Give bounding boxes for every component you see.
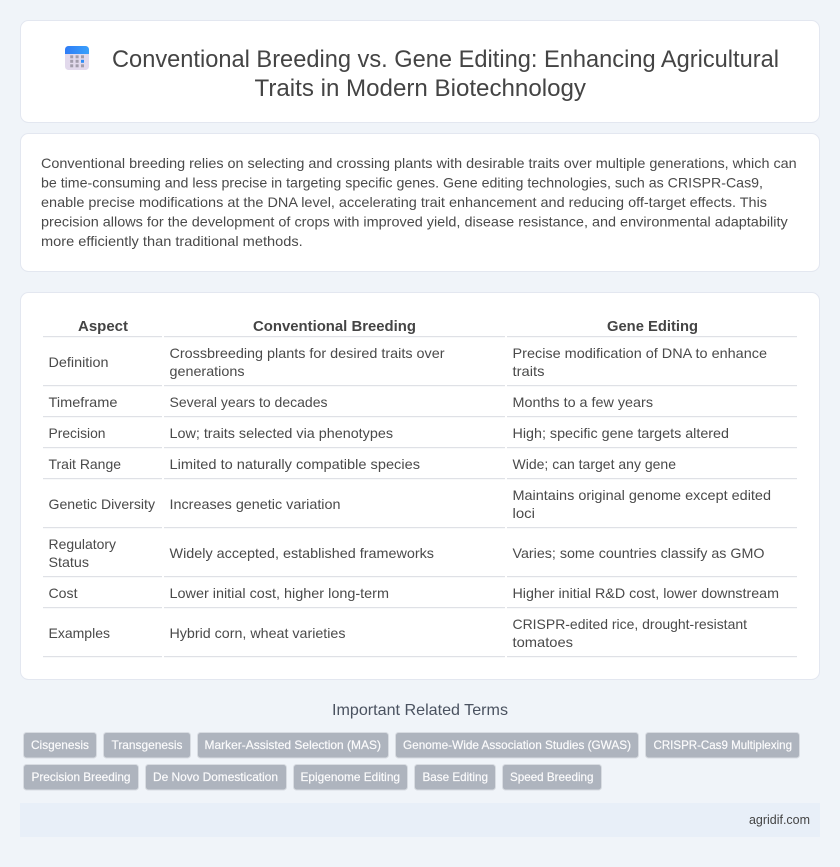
intro text block: enable precise modifications at the DNA level, accelerating trait enhancement and reducing off-target effects. This [41, 194, 767, 210]
title [112, 46, 779, 102]
row: regulatory status: Varies; some countries classify as GMO [512, 545, 765, 561]
row: precision: Low; traits selected via phenotypes [170, 425, 393, 441]
row: genetic diversity [48, 487, 771, 521]
row: precision: Precision [48, 425, 106, 441]
footer [20, 803, 820, 837]
row: regulatory status: Status [48, 554, 89, 570]
row: definition: generations [170, 363, 244, 379]
row: definition [48, 345, 767, 379]
table header: Aspect [78, 319, 128, 335]
row: timeframe [48, 394, 653, 410]
row: timeframe: Months to a few years [512, 394, 653, 410]
row: definition: traits [512, 363, 544, 379]
row: examples [48, 616, 747, 650]
footer: agridif.com [749, 813, 810, 827]
row: trait range: Wide; can target any gene [512, 456, 676, 472]
related term chips: Cisgenesis [31, 738, 89, 752]
related term chips: Marker-Assisted Selection (MAS) [204, 738, 381, 752]
title: Conventional Breeding vs. Gene Editing: Enhancing Agricultural [112, 46, 779, 73]
table header [78, 319, 698, 335]
row: genetic diversity: Maintains original genome except edited [512, 487, 771, 503]
row: precision [48, 425, 729, 441]
intro text block: be time-consuming and less precise in targeting specific genes. Gene editing technologies, such as CRISPR-Cas9, [41, 174, 763, 190]
related term chips: CRISPR-Cas9 Multiplexing [654, 738, 792, 752]
heading: important related terms: Important Related Terms [332, 702, 508, 719]
intro text block: precision allows for the development of crops with improved yield, disease resistance, and environmental adaptability [41, 214, 788, 230]
related term chips: De Novo Domestication [153, 770, 278, 784]
related term chips: Transgenesis [112, 738, 182, 752]
row: definition: Crossbreeding plants for desired traits over [170, 345, 445, 361]
row: cost: Higher initial R&D cost, lower downstream [512, 585, 779, 601]
related term chips [24, 732, 800, 790]
related term chips: Speed Breeding [510, 770, 594, 784]
header panel [20, 20, 820, 122]
row: definition: Precise modification of DNA to enhance [512, 345, 767, 361]
panel: comparison table [20, 292, 820, 680]
row: genetic diversity: loci [512, 505, 535, 521]
intro text block: more efficiently than traditional methods. [41, 233, 303, 249]
table header: Gene Editing [607, 319, 698, 335]
related term chips: Base Editing [422, 770, 488, 784]
row: cost: Cost [48, 585, 78, 601]
row: trait range: Limited to naturally compatible species [170, 456, 420, 472]
row: cost [48, 585, 779, 601]
related term chips: Epigenome Editing [300, 770, 400, 784]
panel: introduction [20, 134, 820, 272]
related term chips: Precision Breeding [32, 770, 130, 784]
intro text block: Conventional breeding relies on selecting and crossing plants with desirable traits over multiple generations, which can [41, 155, 797, 171]
row: examples: Examples [48, 625, 110, 641]
intro text block [41, 155, 797, 249]
row: examples: Hybrid corn, wheat varieties [170, 625, 346, 641]
row: genetic diversity: Genetic Diversity [48, 496, 155, 512]
row: regulatory status: Widely accepted, established frameworks [170, 545, 434, 561]
table header: Conventional Breeding [253, 319, 416, 335]
related term chips: Genome-Wide Association Studies (GWAS) [403, 738, 631, 752]
row: trait range: Trait Range [48, 456, 121, 472]
row: definition: Definition [48, 354, 108, 370]
row: regulatory status [48, 536, 765, 570]
row: trait range [48, 456, 676, 472]
icon: calendar [65, 46, 89, 70]
row: genetic diversity: Increases genetic variation [170, 496, 340, 512]
row: regulatory status: Regulatory [48, 536, 116, 552]
row: examples: CRISPR-edited rice, drought-resistant [512, 616, 747, 632]
row: precision: High; specific gene targets altered [512, 425, 729, 441]
row: timeframe: Several years to decades [170, 394, 328, 410]
row: timeframe: Timeframe [48, 394, 118, 410]
title: Traits in Modern Biotechnology [254, 75, 586, 102]
row: cost: Lower initial cost, higher long-term [170, 585, 389, 601]
row: examples: tomatoes [512, 634, 573, 650]
